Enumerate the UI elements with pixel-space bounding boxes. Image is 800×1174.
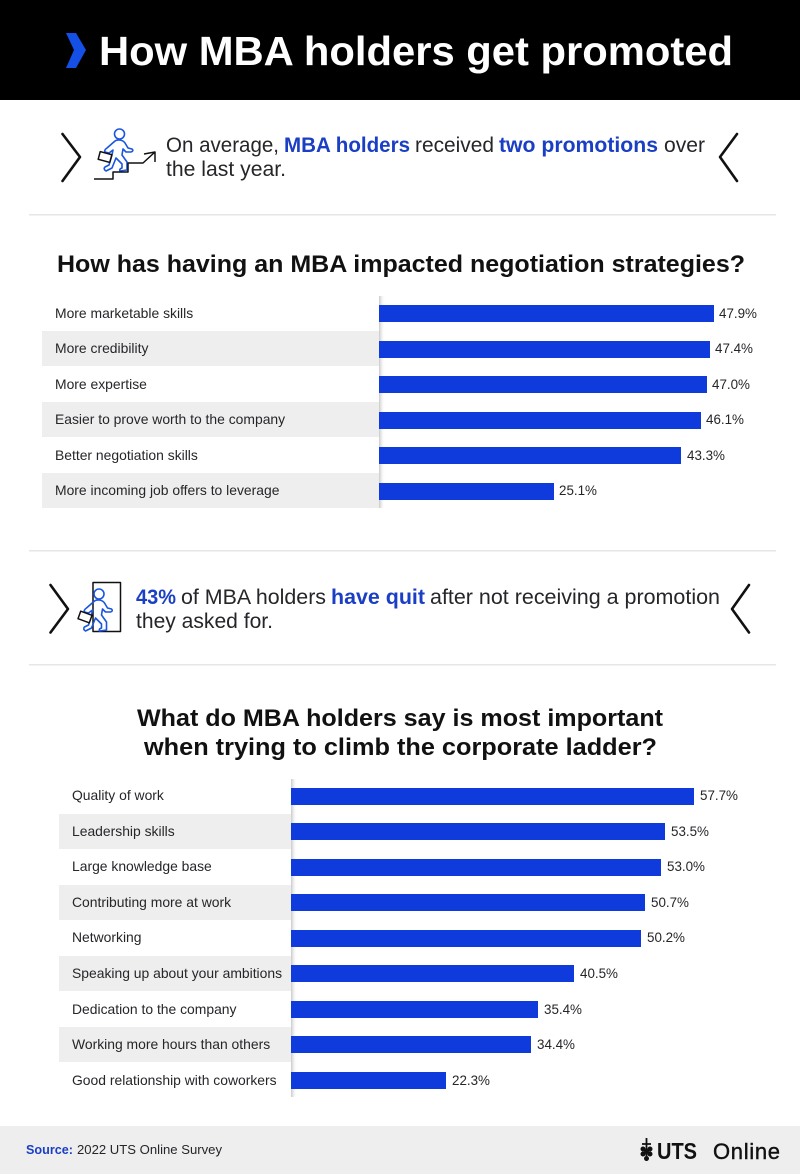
- row: Quality of work: Quality of work: [72, 787, 164, 803]
- row: Good relationship with coworkers: [72, 1072, 490, 1089]
- icon: right bracket chevron: [732, 585, 749, 632]
- icon: left bracket chevron: [62, 134, 80, 181]
- logo: UTS Online: [640, 1138, 780, 1164]
- row: Dedication to the company: 35.4%: [544, 1002, 582, 1017]
- footer band: [0, 1126, 800, 1174]
- row: Networking: Networking: [72, 929, 141, 945]
- title: How MBA holders get promoted: [99, 28, 733, 74]
- icon: right bracket chevron: [720, 134, 737, 181]
- row: More marketable skills: [55, 305, 757, 322]
- heading: corporate ladder: when trying to climb the corporate ladder?: [143, 734, 657, 761]
- row: Working more hours than others: 34.4%: [537, 1037, 575, 1052]
- heading: corporate ladder: What do MBA holders say is most important: [137, 705, 663, 732]
- callout text: the last year.: [166, 157, 286, 181]
- row: Quality of work: 57.7%: [700, 788, 738, 803]
- callout text: have quit: [331, 585, 425, 609]
- row: Large knowledge base: Large knowledge base: [72, 858, 212, 874]
- row: More marketable skills: 47.9%: [719, 306, 757, 321]
- row: Working more hours than others: [72, 1036, 575, 1053]
- callout: two promotions: [62, 129, 737, 181]
- row: Leadership skills: Leadership skills: [72, 823, 175, 839]
- row: Networking: 50.2%: [647, 930, 685, 945]
- row: More incoming job offers: 25.1%: [559, 483, 597, 498]
- row: Working more hours than others: Working more hours than others: [72, 1036, 270, 1052]
- row: Easier to prove worth: 46.1%: [706, 412, 744, 427]
- row: Better negotiation skills: 43.3%: [687, 448, 725, 463]
- row: Easier to prove worth: [55, 411, 744, 429]
- callout text: after not receiving a promotion: [430, 585, 720, 609]
- row: Easier to prove worth: Easier to prove worth to the company: [55, 411, 285, 427]
- row: More expertise: [55, 376, 750, 393]
- icon: title chevron: [66, 33, 86, 68]
- callout text: [136, 585, 720, 633]
- row: More expertise: More expertise: [55, 376, 147, 392]
- callout text: 43%: [136, 585, 176, 609]
- callout text: received: [415, 133, 494, 157]
- row: Large knowledge base: 53.0%: [667, 859, 705, 874]
- row: Networking: [72, 929, 685, 947]
- callout text: of MBA holders: [181, 585, 326, 609]
- icon: left bracket chevron: [50, 585, 68, 632]
- row: Leadership skills: 53.5%: [671, 824, 709, 839]
- heading: corporate ladder: [137, 705, 663, 761]
- row: More credibility: More credibility: [55, 340, 148, 356]
- row: Quality of work: [72, 787, 738, 805]
- heading: negotiation strategies: How has having an MBA impacted negotiation strategies?: [57, 251, 745, 278]
- source note: 2022 UTS Online Survey: [77, 1142, 223, 1157]
- row: Dedication to the company: Dedication to the company: [72, 1001, 237, 1017]
- row: Better negotiation skills: [55, 447, 725, 464]
- callout text: they asked for.: [136, 609, 273, 633]
- row: Speaking up about your ambitions: [72, 965, 618, 982]
- callout: quit rate: [50, 582, 749, 633]
- row: Contributing more at work: [72, 894, 689, 911]
- callout text: On average,: [166, 133, 279, 157]
- row: More incoming job offers: [55, 482, 597, 500]
- callout text: over: [664, 133, 705, 157]
- row: More incoming job offers: More incoming job offers to leverage: [55, 482, 280, 498]
- header band: [0, 0, 800, 100]
- callout text: two promotions: [499, 133, 658, 157]
- row: More credibility: [55, 340, 753, 358]
- row: Contributing more at work: 50.7%: [651, 895, 689, 910]
- row: Dedication to the company: [72, 1001, 582, 1018]
- row: Speaking up about your ambitions: 40.5%: [580, 966, 618, 981]
- icon: person leaving through door: [78, 582, 120, 632]
- row: More expertise: 47.0%: [712, 377, 750, 392]
- bar chart: corporate ladder: [59, 779, 738, 1097]
- row: Large knowledge base: [72, 858, 705, 876]
- row: Contributing more at work: Contributing more at work: [72, 894, 231, 910]
- row: Speaking up about your ambitions: Speaking up about your ambitions: [72, 965, 282, 981]
- row: Good relationship with coworkers: 22.3%: [452, 1073, 490, 1088]
- logo: UTS Online: UTS: [657, 1138, 697, 1164]
- row: Leadership skills: [72, 823, 709, 840]
- callout text: [166, 133, 705, 181]
- row: Better negotiation skills: Better negotiation skills: [55, 447, 198, 463]
- bar chart: negotiation strategies: [42, 296, 757, 508]
- row: More marketable skills: More marketable skills: [55, 305, 193, 321]
- row: More credibility: 47.4%: [715, 341, 753, 356]
- icon: person climbing stairs: [94, 129, 155, 179]
- row: Good relationship with coworkers: Good relationship with coworkers: [72, 1072, 277, 1088]
- logo: UTS Online: Online: [713, 1139, 780, 1164]
- source note: Source:: [26, 1142, 73, 1157]
- callout text: MBA holders: [284, 133, 410, 157]
